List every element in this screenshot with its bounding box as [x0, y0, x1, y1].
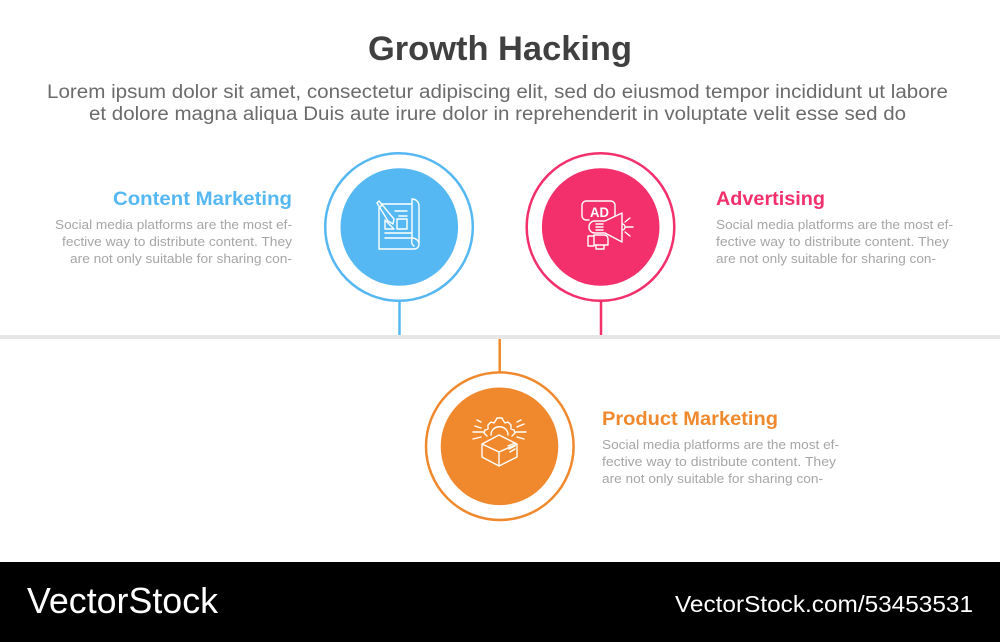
footer url: VectorStock.com/53453531 — [675, 591, 973, 617]
text block: product marketing: Product Marketing — [602, 409, 778, 430]
text block: product marketing: Social media platforms are the most ef- — [602, 437, 839, 452]
text block: product marketing: are not only suitable for sharing con- — [602, 471, 823, 486]
text block: product marketing: fective way to distribute content. They — [602, 454, 837, 469]
intro text: Lorem ipsum dolor sit amet, consectetur adipiscing elit, sed do eiusmod tempor incididunt ut labore — [47, 82, 948, 103]
intro text: et dolore magna aliqua Duis aute irure dolor in reprehenderit in voluptate velit esse sed do — [89, 104, 906, 125]
node: advertising — [527, 153, 674, 335]
text block: content marketing: Social media platforms are the most ef- — [55, 217, 292, 232]
node: product marketing — [426, 339, 574, 520]
footer logo: VectorStock — [27, 580, 219, 621]
footer bar — [0, 562, 1000, 642]
intro text — [47, 82, 948, 125]
text block: advertising: Advertising — [716, 189, 825, 210]
node: content marketing — [325, 153, 473, 335]
text block: content marketing: fective way to distribute content. They — [62, 234, 293, 249]
horizontal timeline — [0, 335, 1000, 339]
icon: AD megaphone — [582, 201, 633, 249]
text block: advertising: are not only suitable for sharing con- — [716, 251, 936, 266]
icon: AD megaphone: AD — [590, 204, 609, 220]
text block: content marketing: are not only suitable for sharing con- — [70, 251, 292, 266]
text block: content marketing: Content Marketing — [113, 189, 292, 210]
icon: gear and box — [473, 418, 526, 466]
text block: advertising — [716, 189, 953, 266]
text block: content marketing — [55, 189, 293, 266]
text block: product marketing — [602, 409, 839, 486]
icon: document with pencil — [377, 199, 419, 249]
text block: advertising: fective way to distribute content. They — [716, 234, 950, 249]
text block: advertising: Social media platforms are the most ef- — [716, 217, 953, 232]
title: Growth Hacking — [368, 30, 632, 68]
